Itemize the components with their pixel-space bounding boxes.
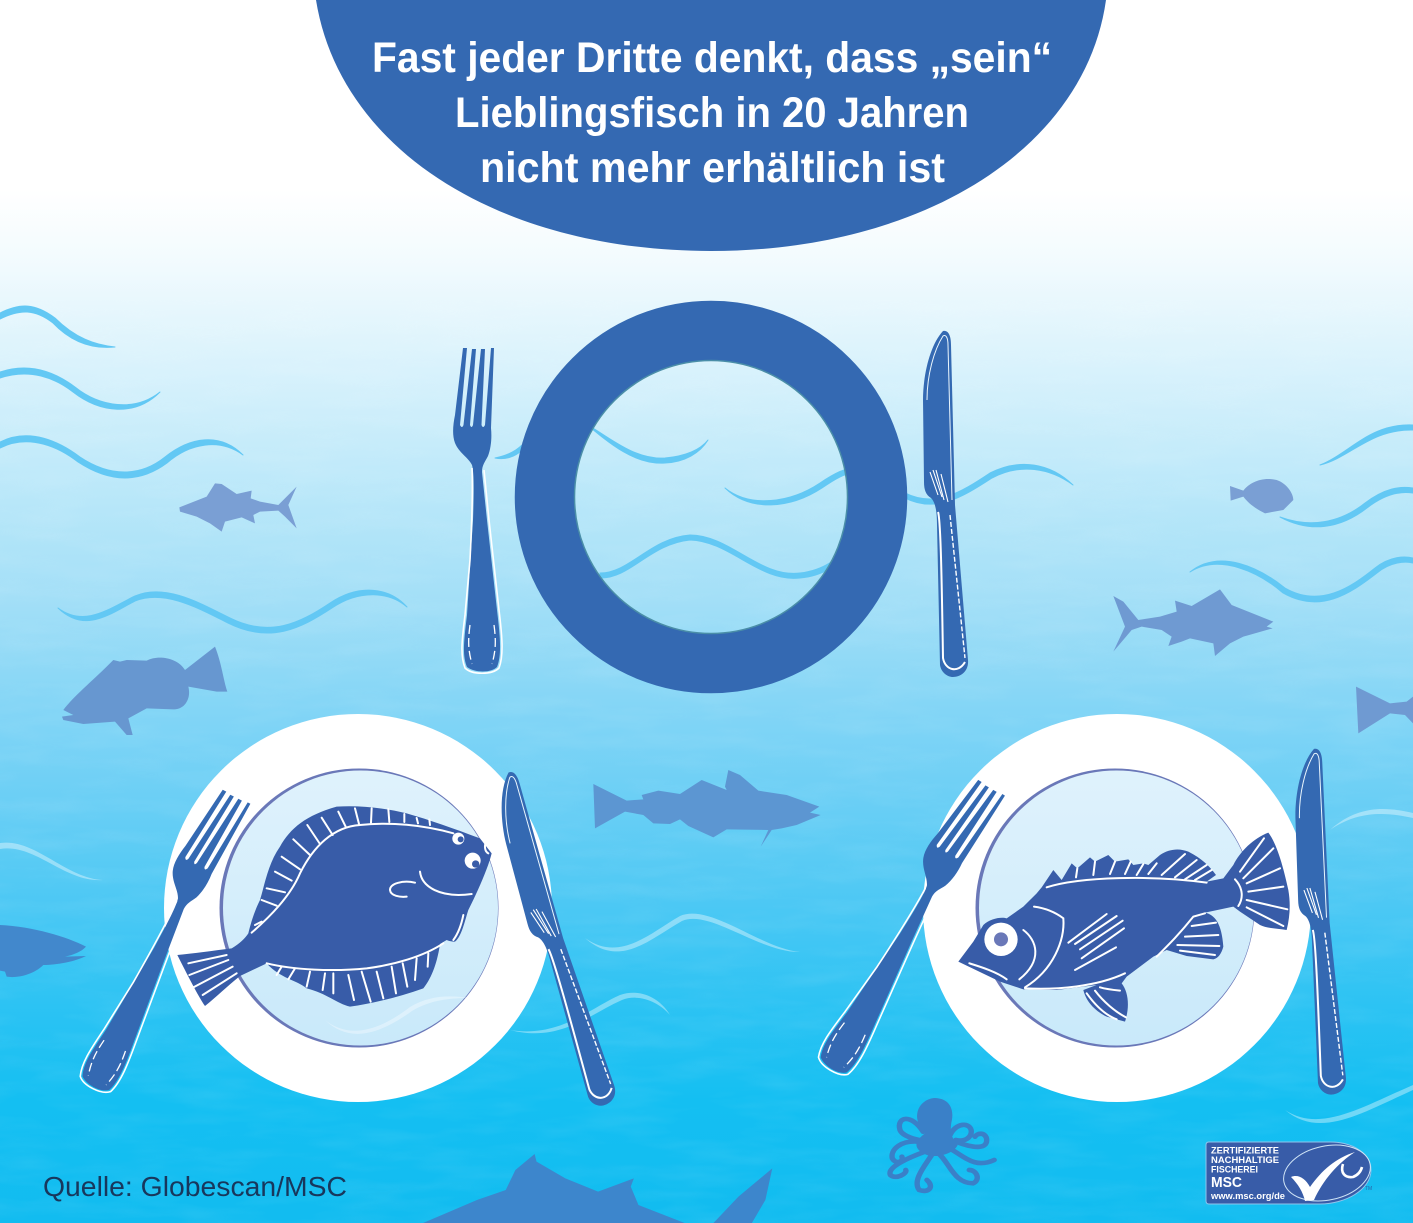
background fish: right edge xyxy=(1356,687,1413,733)
knife xyxy=(923,331,968,677)
background fish: center xyxy=(593,770,821,847)
MSC logo xyxy=(1206,1137,1376,1209)
knife xyxy=(489,766,618,1113)
source note: Quelle: Globescan/MSC xyxy=(43,1171,347,1202)
empty plate xyxy=(544,330,878,664)
MSC logo check mark xyxy=(1291,1152,1355,1201)
title banner xyxy=(316,0,1106,251)
empty plate with cutlery xyxy=(453,330,968,677)
MSC logo text: NACHHALTIGE xyxy=(1211,1155,1280,1166)
title text xyxy=(372,34,1052,192)
title text: Fast jeder Dritte denkt, dass „sein“ xyxy=(372,34,1052,82)
plate xyxy=(164,714,552,1102)
MSC logo fish mark xyxy=(1342,1164,1362,1177)
octopus xyxy=(890,1098,994,1191)
title text: nicht mehr erhältlich ist xyxy=(480,144,945,192)
background fish: left edge xyxy=(0,925,86,977)
MSC logo text xyxy=(1210,1146,1285,1202)
MSC logo text: FISCHEREI xyxy=(1211,1164,1258,1176)
right plate with rockfish xyxy=(806,714,1346,1102)
faint waves xyxy=(0,809,1413,1123)
background fish: bottom xyxy=(423,1154,772,1223)
flounder xyxy=(177,806,492,1007)
plate xyxy=(923,714,1311,1102)
faint wave on dish xyxy=(325,996,470,1034)
fork xyxy=(453,348,502,673)
trademark: TM xyxy=(1365,1186,1372,1192)
background fish: small right xyxy=(1230,479,1293,513)
rockfish xyxy=(958,833,1290,1022)
left plate with flounder xyxy=(67,714,618,1113)
MSC logo text: ZERTIFIZIERTE xyxy=(1211,1146,1280,1156)
background fish: tuna left xyxy=(179,483,297,532)
knife xyxy=(1294,748,1346,1095)
title text: Lieblingsfisch in 20 Jahren xyxy=(455,89,969,137)
MSC logo text: MSC xyxy=(1211,1174,1242,1191)
water texture xyxy=(0,300,1413,1223)
background fish: grouper left xyxy=(62,647,227,735)
fork xyxy=(806,775,1012,1080)
MSC logo text: www.msc.org/de xyxy=(1210,1191,1285,1202)
fork xyxy=(67,785,258,1098)
waves xyxy=(0,306,1413,633)
background fish: tuna right xyxy=(1113,589,1273,656)
